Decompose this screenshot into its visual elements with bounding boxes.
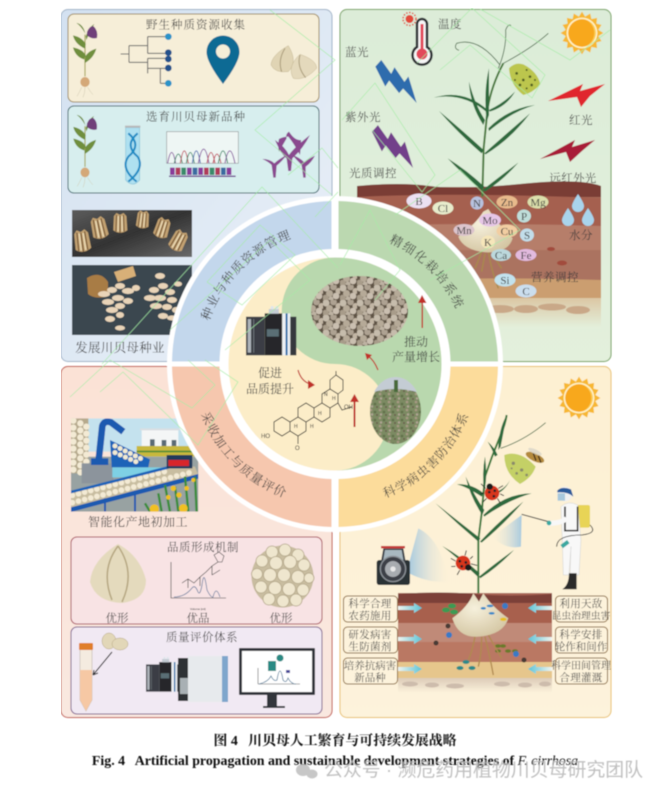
sub-panel: quality evaluation system: [71, 627, 322, 714]
icon: bulbs: [271, 46, 317, 79]
element badges: Fe: [520, 250, 532, 262]
illustration: soil with pests: [398, 592, 552, 693]
callout: resistant varieties: 培养抗病害: [344, 659, 396, 672]
chart: chromatogram with molecule: [171, 552, 226, 611]
text: account name: 公众号 · 濒危药用植物川贝母研究团队: [324, 759, 643, 781]
icon: thermometer: [403, 12, 431, 65]
illustration: bulbs in circle: [252, 544, 314, 608]
illustration: plant with flower: [434, 25, 548, 197]
panel: germplasm and seed management: [61, 8, 612, 719]
element badges: Mn: [456, 225, 472, 237]
chart: chromatogram with molecule: Volume [ml]: [190, 607, 206, 611]
element badges: N: [473, 198, 481, 210]
photo: dried bulbs: [72, 210, 192, 257]
watermark: account name: [296, 759, 643, 781]
illustration: large bulb: [90, 544, 146, 603]
ring segment: top-right: [338, 201, 498, 362]
label: good quality: 优品: [186, 611, 210, 625]
sub-panel: quality formation mechanism: [71, 537, 322, 625]
element badges: [406, 194, 548, 298]
callout: pesticide use: 科学合理: [348, 597, 392, 610]
watermark: green outlined pattern: [70, 8, 610, 445]
element badges: Mg: [530, 197, 546, 209]
sub-panel: wild germplasm collection: [68, 14, 319, 102]
element badges: S: [524, 230, 530, 242]
label: promote quality: 品质提升: [246, 381, 294, 396]
icon: water drops: [562, 194, 594, 226]
molecule structure: H: [318, 411, 322, 417]
heading: wild germplasm: 野生种质资源收集: [146, 18, 246, 32]
icon: DNA test tube: [125, 126, 140, 184]
icon: phylogenetic tree: [121, 33, 172, 87]
illustration: smart processing line: [71, 418, 198, 514]
label: develop seed industry: 发展川贝母种业: [75, 340, 165, 355]
illustration: plant with ladybugs and bee: [436, 415, 546, 593]
callout: natural enemies: 利用天敌: [559, 597, 603, 610]
callout: biocontrol agents: [344, 627, 398, 653]
sub-panel: breeding new varieties: [68, 106, 319, 193]
label: good shape: 优形: [270, 611, 293, 625]
label: drive yield: [392, 334, 440, 364]
callout: rotation: 科学安排: [559, 628, 603, 641]
element badges: B: [415, 196, 423, 208]
icon: ladybug lower: [448, 548, 478, 577]
image: field: [370, 377, 421, 444]
element badges: Si: [500, 275, 510, 287]
icon: tractor with spray: [377, 528, 448, 585]
callout: resistant varieties: [344, 658, 398, 684]
label: nutrient regulation: 营养调控: [531, 270, 579, 284]
label: promote quality: [246, 365, 294, 396]
ring label: harvest processing: 采收加工与质量评价: [200, 412, 286, 498]
callout: biocontrol agents: 研发病害: [348, 628, 392, 641]
label: drive yield: 推动: [404, 334, 428, 349]
element badges: Cl: [438, 203, 448, 215]
element badges: P: [521, 211, 527, 223]
heading: quality evaluation: 质量评价体系: [166, 630, 238, 644]
callouts: right measures: [551, 596, 611, 684]
heading: breeding: 选育川贝母新品种: [146, 110, 246, 124]
arrow: curved to grain: [365, 353, 378, 370]
ring segment: bottom-right: [338, 366, 498, 527]
callouts: left measures: [344, 596, 398, 684]
icon: wechat bubbles: [296, 764, 318, 778]
label: light regulation: 光质调控: [349, 166, 397, 180]
element badges: Mo: [482, 215, 498, 227]
icon: purple lightning: [372, 125, 413, 168]
ring label: precision cultivation: 精细化栽培系统: [390, 234, 464, 309]
arrow: sample to tube: [93, 652, 112, 675]
callout: natural enemies: 昆虫治理虫害: [552, 609, 611, 622]
panel: pest and disease control: [340, 366, 611, 718]
ring segment: top-left: [172, 201, 332, 362]
element badges: C: [522, 286, 530, 298]
icon: HPLC instrument: [246, 306, 296, 355]
heading: quality mechanism: 品质形成机制: [167, 540, 239, 554]
callout: field management: 科学田间管理: [551, 659, 611, 672]
icon: sun: [561, 12, 603, 54]
icon: fritillaria plant: [73, 23, 97, 97]
icon: centrifuge tube: [79, 643, 93, 711]
icon: purple seedlings: [262, 132, 315, 178]
arrow: curved to molecule: [298, 370, 315, 389]
caption: English: Fig. 4 Artificial propagation and sustainable development strategies of F. cirrhosa: [92, 754, 578, 769]
label: red light: 红光: [569, 113, 593, 127]
label: good shape: 优形: [106, 611, 129, 625]
icon: red lightning: [548, 84, 605, 107]
label: promote quality: 促进: [258, 365, 282, 380]
arrow: up bottom: [350, 394, 359, 427]
label: water: 水分: [569, 228, 593, 242]
element badges: Ca: [495, 250, 507, 262]
illustration: bulb with roots: [458, 209, 513, 288]
ring label: seed and germplasm: 种业与种质资源管理: [200, 229, 292, 320]
label: temperature: 温度: [438, 17, 462, 31]
label: ultraviolet: 紫外光: [345, 110, 381, 124]
callout: pesticide use: [344, 596, 398, 622]
icon: sprayer worker: [492, 487, 593, 589]
icon: bulbs: [102, 633, 128, 650]
label: drive yield: 产量增长: [392, 349, 440, 364]
soil profile: [357, 181, 601, 328]
molecule structure: OH: [344, 405, 353, 411]
panel: precision cultivation: [340, 10, 611, 362]
ring label: pest control: 科学病虫害防治体系: [382, 412, 469, 498]
icon: mass spectrometer: [146, 656, 228, 702]
molecule structure: H: [294, 424, 298, 430]
inner disc beige: [228, 258, 442, 470]
callout: rotation: [555, 627, 608, 653]
photo: bulb slices: [72, 265, 192, 335]
arrows: cyan pointing inward: [398, 603, 552, 674]
callout: natural enemies: [552, 596, 611, 622]
label: far red light: 远红外光: [549, 171, 597, 185]
illustration: bulb with roots: [452, 593, 508, 675]
callout: resistant varieties: 新品种: [354, 671, 386, 684]
icon: monitor with chart: [239, 648, 315, 708]
icon: sun: [558, 377, 600, 419]
central ring diagram: [166, 195, 504, 533]
element badges: Zn: [501, 197, 514, 209]
icon: location pin: [206, 36, 240, 84]
molecule structure: O: [295, 446, 300, 452]
callout: rotation: 轮作和间作: [555, 640, 608, 653]
icon: plant: [73, 115, 97, 187]
molecule structure: H: [332, 396, 336, 402]
callout: pesticide use: 农药施用: [348, 609, 392, 622]
icon: ladybug upper: [480, 483, 504, 503]
molecule structure: H: [310, 424, 314, 430]
ring segment: bottom-left: [172, 366, 332, 527]
icon: far-red lightning: [540, 140, 595, 162]
molecule structure: [261, 371, 353, 452]
label: smart primary processing: 智能化产地初加工: [88, 514, 188, 529]
inner disc green yin-yang: [282, 258, 442, 470]
molecule structure: HO: [261, 434, 270, 440]
element badges: K: [484, 237, 492, 249]
callout: field management: 合理灌溉: [559, 671, 603, 684]
label: blue light: 蓝光: [345, 45, 369, 59]
molecule structure: N: [324, 392, 328, 398]
callout: field management: [551, 658, 611, 684]
image: harvested bulbs: [311, 276, 408, 346]
chart: sequencing chromatogram: [167, 132, 238, 177]
caption: Chinese: 图 4 川贝母人工繁育与可持续发展战略: [213, 732, 457, 749]
icon: blue lightning: [375, 60, 417, 103]
element badges: Cu: [501, 226, 514, 238]
panel: harvest processing and quality: [61, 366, 332, 718]
arrow: up right: [418, 295, 426, 328]
callout: biocontrol agents: 生防菌剂: [348, 640, 392, 653]
